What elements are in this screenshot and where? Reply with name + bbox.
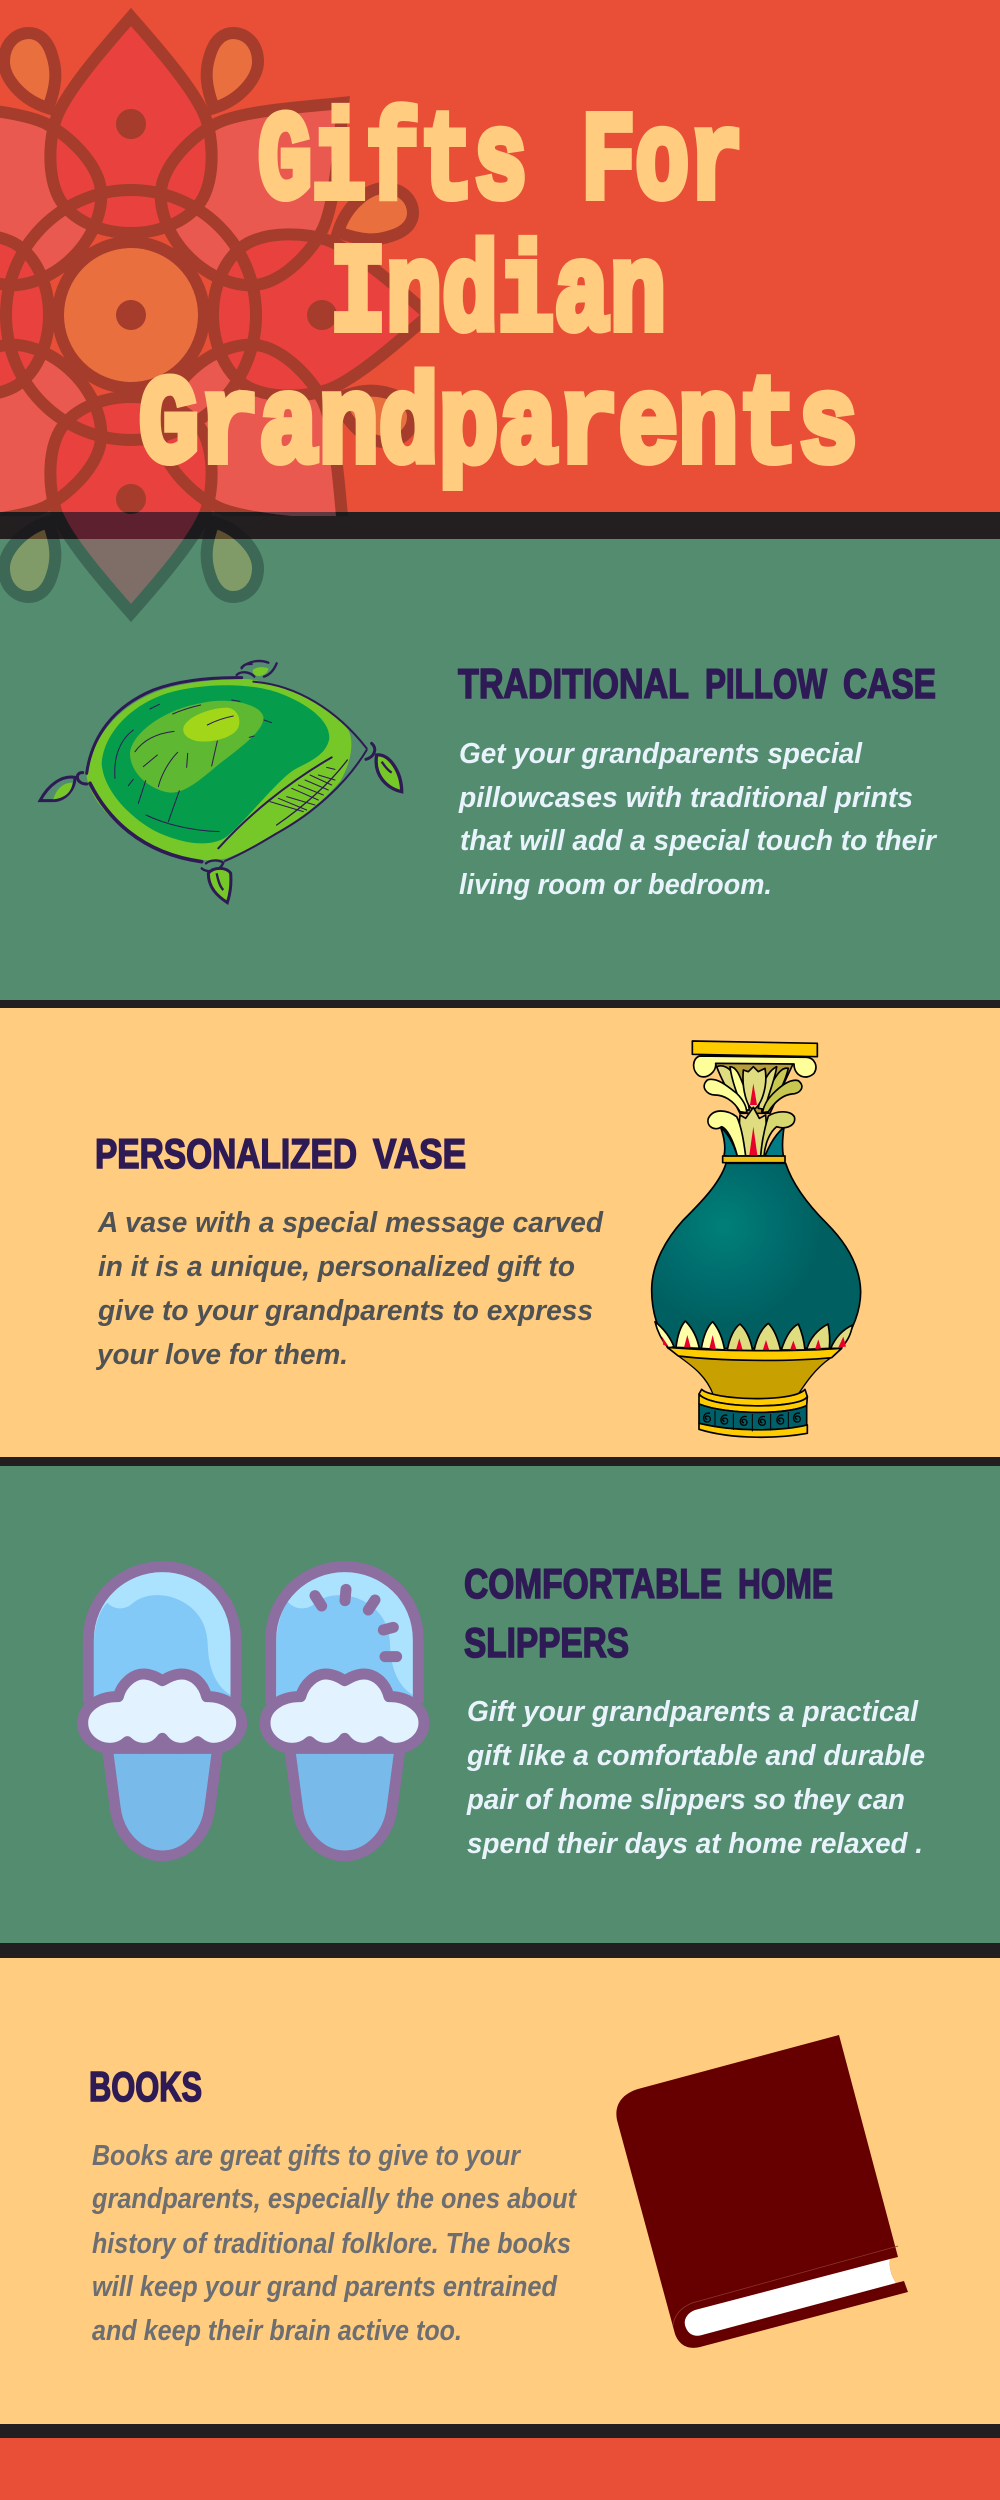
text: slippers description: gift like a comfortable and durable <box>466 1740 925 1772</box>
panel: header background <box>0 0 1000 512</box>
panel: books <box>0 1958 1000 2424</box>
text: pillow case description: that will add a special touch to their <box>460 825 938 857</box>
text: vase description: your love for them. <box>95 1339 348 1371</box>
heading: comfortable home slippers: HOME <box>738 1560 833 1607</box>
panel: personalized vase <box>0 1008 1000 1457</box>
panel: comfortable home slippers <box>0 1466 1000 1943</box>
text: pillow case description: Get your grandparents special <box>459 738 863 770</box>
title: Gifts For <box>258 95 743 235</box>
text: books description: and keep their brain active too. <box>92 2315 462 2347</box>
text: slippers description: pair of home slippers so they can <box>466 1784 905 1816</box>
text: books description: will keep your grand parents entrained <box>92 2271 558 2303</box>
text: pillow case description <box>458 738 938 901</box>
text: vase description: give to your grandparents to express <box>97 1295 593 1327</box>
text: slippers description: Gift your grandparents a practical <box>467 1696 919 1728</box>
heading: traditional pillow case: TRADITIONAL <box>458 660 689 707</box>
text: books description <box>91 2140 577 2347</box>
text: slippers description: spend their days at home relaxed . <box>467 1828 923 1860</box>
heading: traditional pillow case: PILLOW <box>705 660 827 707</box>
title: Indian <box>330 227 666 367</box>
text: vase description: in it is a unique, personalized gift to <box>98 1251 575 1283</box>
text: pillow case description: living room or bedroom. <box>459 869 772 901</box>
heading: comfortable home slippers: SLIPPERS <box>464 1619 629 1666</box>
heading: traditional pillow case <box>458 660 936 707</box>
text: books description: history of traditional folklore. The books <box>92 2228 571 2260</box>
heading: personalized vase: PERSONALIZED <box>95 1130 357 1177</box>
heading: traditional pillow case: CASE <box>843 660 936 707</box>
text: vase description: A vase with a special message carved <box>97 1207 604 1239</box>
icon: left slipper <box>83 1567 242 1856</box>
text: slippers description <box>466 1696 925 1860</box>
icon: pair of slippers <box>83 1567 424 1856</box>
text: books description: Books are great gifts to give to your <box>92 2140 521 2172</box>
panel: traditional pillow case <box>0 539 1000 1000</box>
panel: footer band <box>0 2438 1000 2500</box>
icon: right slipper <box>265 1567 424 1856</box>
title <box>139 95 858 499</box>
icon: mandala flower <box>0 17 429 613</box>
text: books description: grandparents, especially the ones about <box>91 2183 577 2215</box>
text: vase description <box>95 1207 604 1371</box>
heading: personalized vase: VASE <box>373 1130 466 1177</box>
icon: red book <box>616 2035 908 2348</box>
text: pillow case description: pillowcases with traditional prints <box>458 782 913 814</box>
icon: teal vase <box>652 1041 861 1437</box>
icon: green pillow <box>40 661 402 903</box>
heading: books: BOOKS <box>89 2063 202 2110</box>
heading: comfortable home slippers: COMFORTABLE <box>464 1560 722 1607</box>
heading: comfortable home slippers <box>464 1560 833 1666</box>
